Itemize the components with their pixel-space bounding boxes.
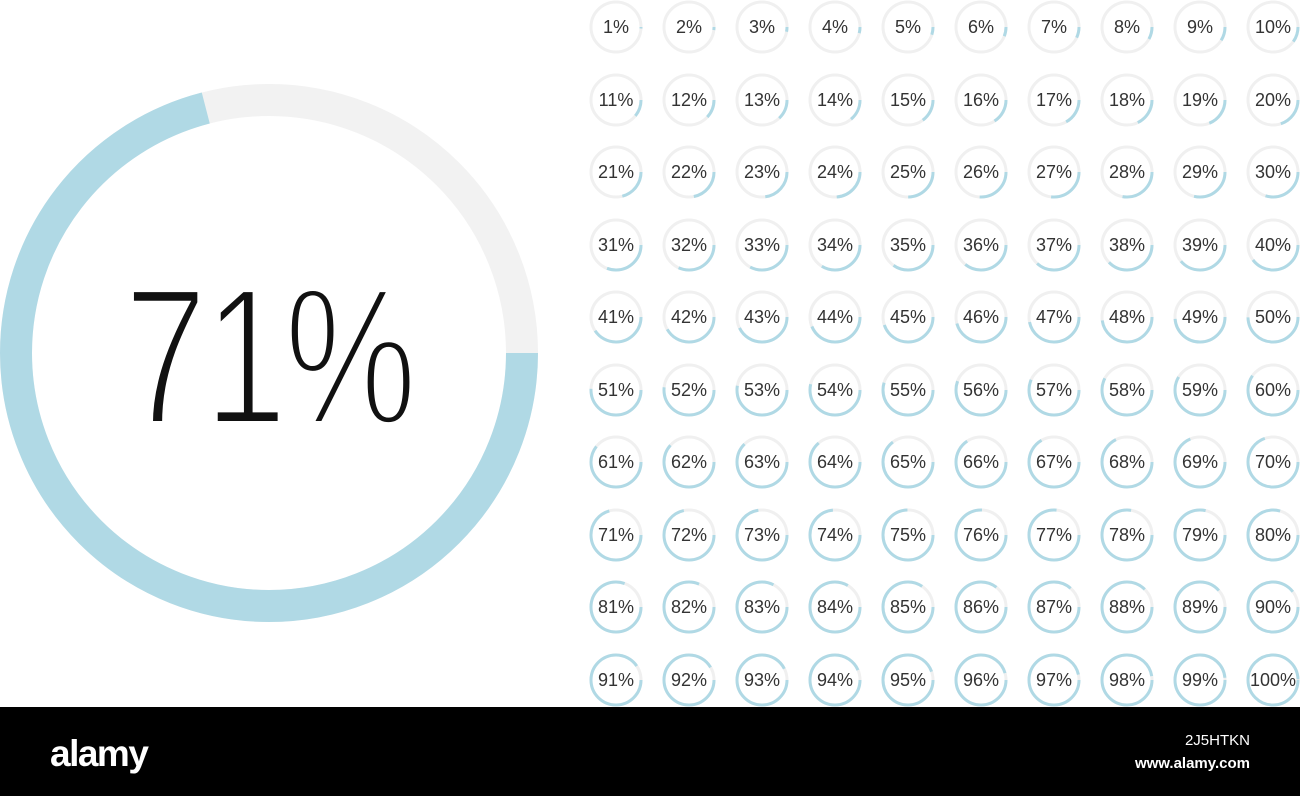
row 5: 45%	[890, 307, 926, 327]
big label: 71%	[124, 247, 414, 466]
row 8: 75%	[890, 525, 926, 545]
row 8: 77%	[1036, 525, 1072, 545]
row 5: 43%	[744, 307, 780, 327]
row 1: 9%	[1187, 17, 1213, 37]
row 10: 92%	[671, 670, 707, 690]
row 9: 88%	[1109, 597, 1145, 617]
row 6: 60%	[1255, 380, 1291, 400]
row 10: 93%	[744, 670, 780, 690]
row 1: 5%	[895, 17, 921, 37]
row 8: 71%	[598, 525, 634, 545]
footer url: www.alamy.com	[1134, 755, 1250, 772]
row 5: 49%	[1182, 307, 1218, 327]
row 9: 85%	[890, 597, 926, 617]
row 7: 69%	[1182, 452, 1218, 472]
row 5: 50%	[1255, 307, 1291, 327]
footer image id: 2J5HTKN	[1185, 732, 1250, 749]
row 1: 4%	[822, 17, 848, 37]
row 6: 54%	[817, 380, 853, 400]
row 6: 58%	[1109, 380, 1145, 400]
row 2: 15%	[890, 90, 926, 110]
row 10: 94%	[817, 670, 853, 690]
row 6: 56%	[963, 380, 999, 400]
row 1: 8%	[1114, 17, 1140, 37]
row 7: 63%	[744, 452, 780, 472]
row 1: 10%	[1255, 17, 1291, 37]
row 4: 40%	[1255, 235, 1291, 255]
row 8: 78%	[1109, 525, 1145, 545]
row 5	[591, 292, 1298, 342]
row 2: 16%	[963, 90, 999, 110]
row 10: 100%	[1250, 670, 1296, 690]
row 3: 23%	[744, 162, 780, 182]
row 9: 87%	[1036, 597, 1072, 617]
row 3: 27%	[1036, 162, 1072, 182]
row 4: 36%	[963, 235, 999, 255]
row 7: 62%	[671, 452, 707, 472]
row 1: 2%	[676, 17, 702, 37]
row 9: 83%	[744, 597, 780, 617]
row 3: 25%	[890, 162, 926, 182]
row 8: 79%	[1182, 525, 1218, 545]
row 10: 96%	[963, 670, 999, 690]
row 7	[591, 437, 1298, 487]
grid of small percentage donuts	[591, 2, 1298, 705]
row 6: 51%	[598, 380, 634, 400]
row 2: 17%	[1036, 90, 1072, 110]
row 7: 64%	[817, 452, 853, 472]
big donut chart 71%	[16, 100, 522, 606]
row 1: 1%	[603, 17, 629, 37]
row 5: 41%	[598, 307, 634, 327]
row 8: 72%	[671, 525, 707, 545]
row 3: 30%	[1255, 162, 1291, 182]
row 4: 37%	[1036, 235, 1072, 255]
row 4: 35%	[890, 235, 926, 255]
row 6: 52%	[671, 380, 707, 400]
row 5: 42%	[671, 307, 707, 327]
row 3: 22%	[671, 162, 707, 182]
row 5: 46%	[963, 307, 999, 327]
row 8: 76%	[963, 525, 999, 545]
row 9: 86%	[963, 597, 999, 617]
row 10: 97%	[1036, 670, 1072, 690]
row 7: 70%	[1255, 452, 1291, 472]
row 10: 99%	[1182, 670, 1218, 690]
row 3	[591, 147, 1298, 197]
row 4: 32%	[671, 235, 707, 255]
row 7: 67%	[1036, 452, 1072, 472]
row 6: 59%	[1182, 380, 1218, 400]
row 7: 61%	[598, 452, 634, 472]
row 4: 38%	[1109, 235, 1145, 255]
row 4	[591, 220, 1298, 270]
row 10: 95%	[890, 670, 926, 690]
row 1: 7%	[1041, 17, 1067, 37]
row 4: 39%	[1182, 235, 1218, 255]
row 3: 24%	[817, 162, 853, 182]
row 7: 66%	[963, 452, 999, 472]
row 6: 55%	[890, 380, 926, 400]
row 2: 11%	[599, 90, 633, 110]
row 8: 73%	[744, 525, 780, 545]
row 4: 31%	[598, 235, 634, 255]
row 9: 84%	[817, 597, 853, 617]
row 4: 34%	[817, 235, 853, 255]
row 5: 48%	[1109, 307, 1145, 327]
row 3: 26%	[963, 162, 999, 182]
row 1	[591, 2, 1298, 52]
row 8	[591, 510, 1298, 560]
row 2	[591, 75, 1298, 125]
row 6: 53%	[744, 380, 780, 400]
row 9: 90%	[1255, 597, 1291, 617]
row 9	[591, 582, 1298, 632]
row 9: 82%	[671, 597, 707, 617]
row 1: 3%	[749, 17, 775, 37]
row 2: 20%	[1255, 90, 1291, 110]
row 8: 80%	[1255, 525, 1291, 545]
row 2: 19%	[1182, 90, 1218, 110]
row 5: 47%	[1036, 307, 1072, 327]
row 4: 33%	[744, 235, 780, 255]
row 9: 89%	[1182, 597, 1218, 617]
row 7: 65%	[890, 452, 926, 472]
row 5: 44%	[817, 307, 853, 327]
row 2: 13%	[744, 90, 780, 110]
row 10: 98%	[1109, 670, 1145, 690]
row 10: 91%	[598, 670, 634, 690]
row 1: 6%	[968, 17, 994, 37]
row 8: 74%	[817, 525, 853, 545]
footer bar	[0, 707, 1300, 796]
row 3: 21%	[598, 162, 634, 182]
row 2: 12%	[671, 90, 707, 110]
row 2: 18%	[1109, 90, 1145, 110]
row 6	[591, 365, 1298, 415]
row 2: 14%	[817, 90, 853, 110]
row 7: 68%	[1109, 452, 1145, 472]
row 3: 28%	[1109, 162, 1145, 182]
row 9: 81%	[598, 597, 634, 617]
row 3: 29%	[1182, 162, 1218, 182]
row 10	[591, 655, 1298, 705]
row 6: 57%	[1036, 380, 1072, 400]
footer logo: alamy	[50, 733, 149, 774]
